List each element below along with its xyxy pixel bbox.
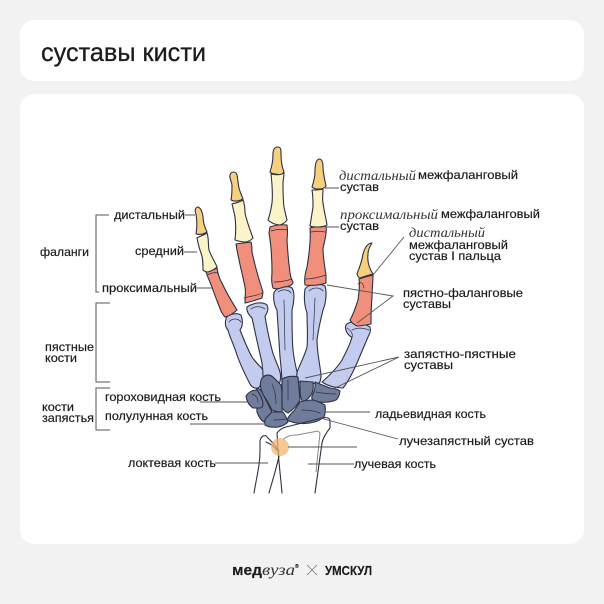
middle phalanges [197, 173, 327, 272]
footer logos: ® [295, 563, 299, 570]
footer logos: вуза [262, 562, 295, 579]
proximal phalanges [206, 225, 373, 326]
right labels: проксимальный [340, 208, 438, 223]
right labels: ладьевидная кость [375, 407, 486, 421]
left labels: запястья [42, 411, 94, 425]
left labels: кости [45, 351, 77, 365]
right labels: сустав I пальца [409, 249, 501, 263]
panel: header [20, 20, 584, 81]
left labels [40, 208, 221, 470]
left labels: полулунная кость [105, 409, 208, 423]
forearm bones [254, 418, 330, 493]
carpal bones [246, 375, 340, 427]
right labels: дистальный [409, 226, 485, 241]
footer logos [232, 562, 372, 579]
right labels: суставы [404, 358, 453, 372]
left labels: фаланги [40, 245, 89, 259]
hand diagram [195, 147, 373, 493]
left labels: проксимальный [102, 281, 197, 295]
metacarpal bones [225, 284, 370, 388]
left labels: локтевая кость [128, 456, 216, 470]
right labels: запястно-пястные [404, 347, 516, 361]
right labels: суставы [403, 297, 451, 311]
right labels: пястно-фаланговые [403, 286, 523, 300]
title: суставы кисти [41, 37, 206, 67]
right labels [339, 168, 540, 471]
right labels: межфаланговый [441, 207, 540, 221]
leader lines [184, 188, 404, 464]
left labels: кости [42, 400, 74, 414]
right labels: сустав [340, 180, 379, 194]
distal phalanges [195, 147, 373, 278]
left labels: дистальный [114, 208, 185, 222]
right labels: лучезапястный сустав [399, 434, 534, 448]
left labels: средний [135, 244, 184, 258]
right labels: сустав [340, 219, 379, 233]
brackets [96, 215, 110, 430]
highlight: radiocarpal joint [271, 438, 289, 456]
panel: main [20, 94, 584, 544]
right labels: межфаланговый [418, 168, 518, 182]
left labels: гороховидная кость [105, 390, 221, 404]
footer logos: УМСКУЛ [325, 563, 372, 578]
right labels: лучевая кость [354, 457, 436, 471]
right labels: межфаланговый [409, 238, 508, 252]
right labels: дистальный [339, 169, 416, 184]
left labels: пястные [45, 340, 94, 354]
footer logos: мед [232, 562, 262, 579]
